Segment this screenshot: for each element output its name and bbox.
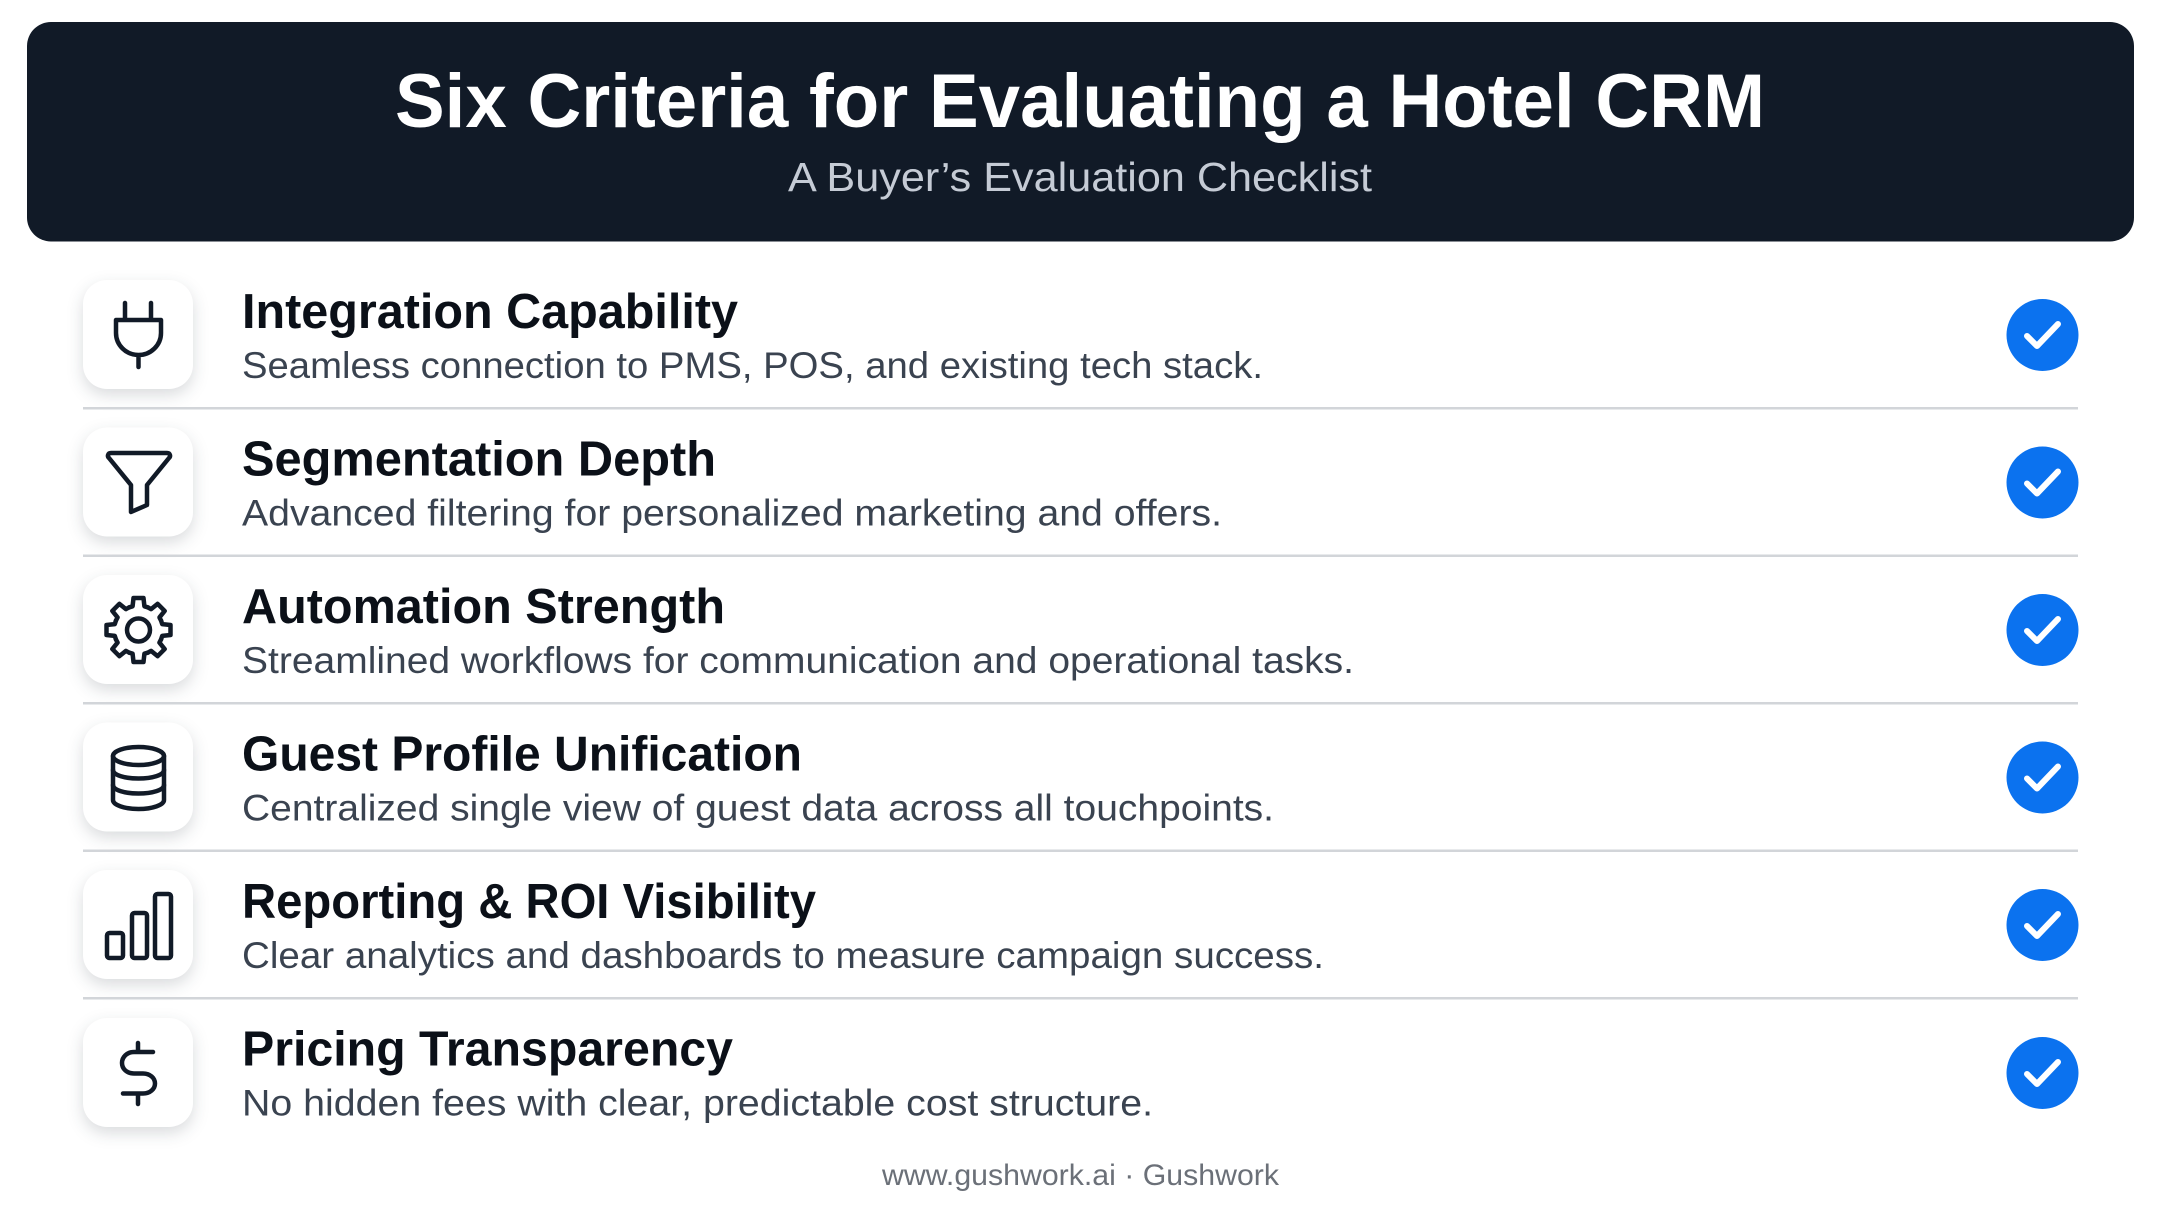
check badge: [2006, 889, 2078, 961]
heading: Pricing Transparency: [242, 1022, 733, 1076]
row: Guest Profile Unification: [83, 722, 2078, 832]
header banner: [27, 22, 2134, 242]
description: Advanced filtering for personalized marketing and offers.: [242, 492, 1222, 534]
description: Clear analytics and dashboards to measure campaign success.: [242, 934, 1324, 976]
footer: www.gushwork.ai · Gushwork: [881, 1159, 1280, 1192]
row: Segmentation Depth: [83, 428, 2078, 536]
check badge: [2006, 446, 2078, 518]
icon card: funnel: [83, 428, 193, 536]
icon card: bar chart: [83, 870, 193, 979]
check badge: [2006, 742, 2078, 814]
heading: Reporting & ROI Visibility: [242, 875, 816, 929]
row: Pricing Transparency: [83, 1018, 2078, 1127]
heading: Automation Strength: [242, 580, 725, 634]
icon card: database: [83, 722, 193, 832]
description: Centralized single view of guest data across all touchpoints.: [242, 786, 1274, 828]
subtitle: A Buyer’s Evaluation Checklist: [788, 154, 1373, 200]
check badge: [2006, 299, 2078, 371]
row: Reporting & ROI Visibility: [83, 870, 2078, 979]
icon card: gear: [83, 575, 193, 684]
heading: Integration Capability: [242, 285, 738, 339]
icon card: dollar sign: [83, 1018, 193, 1127]
row: Automation Strength: [83, 575, 2078, 684]
description: Streamlined workflows for communication and operational tasks.: [242, 639, 1354, 681]
check badge: [2006, 594, 2078, 666]
heading: Segmentation Depth: [242, 432, 716, 486]
check badge: [2006, 1037, 2078, 1109]
title: Six Criteria for Evaluating a Hotel CRM: [395, 59, 1765, 144]
icon card: plug: [83, 280, 193, 389]
row: Integration Capability: [83, 280, 2078, 389]
description: No hidden fees with clear, predictable cost structure.: [242, 1082, 1153, 1124]
heading: Guest Profile Unification: [242, 728, 802, 782]
description: Seamless connection to PMS, POS, and existing tech stack.: [242, 344, 1263, 386]
